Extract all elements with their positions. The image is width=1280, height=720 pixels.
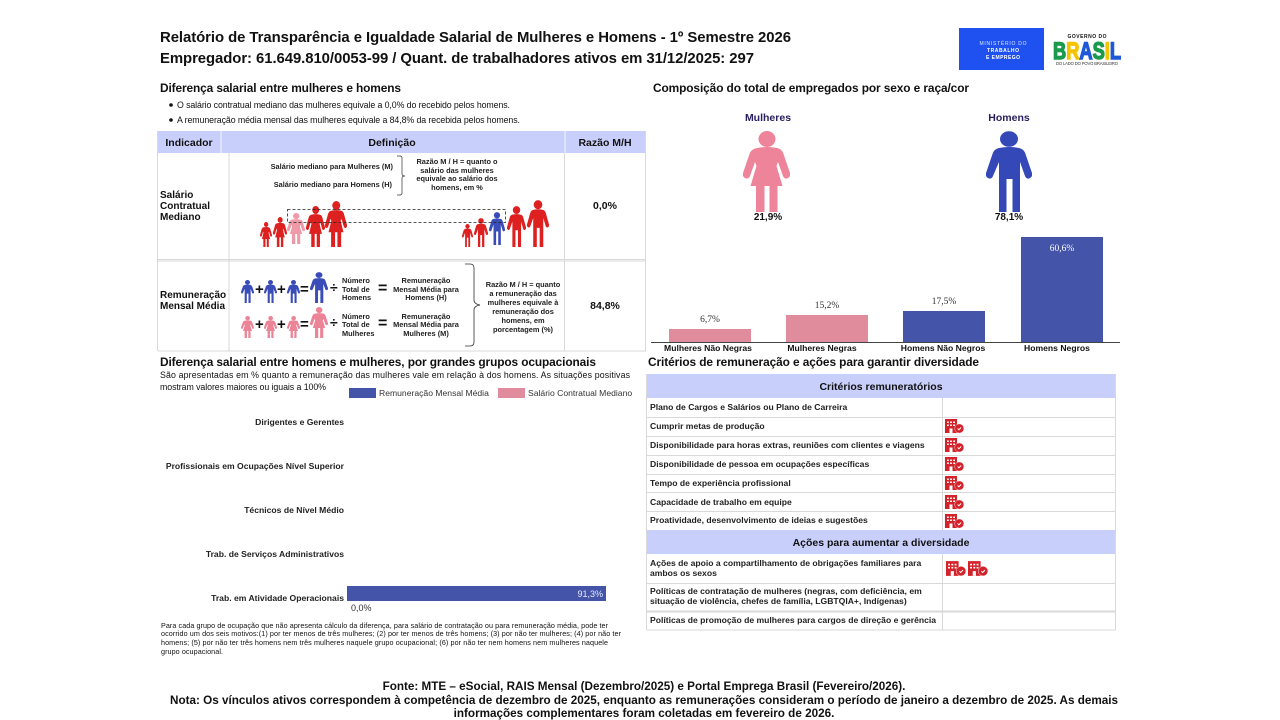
median highlight box <box>288 210 506 222</box>
bar chart: sexo e raça/cor: Homens Não Negros <box>901 343 985 353</box>
formula: men: Número <box>342 276 370 285</box>
summary bullets: O salário contratual mediano das mulheres equivale a 0,0% do recebido pelos homens. <box>177 100 510 110</box>
footnote: motivos: grupo ocupacional. <box>161 647 223 656</box>
action rows <box>650 558 936 625</box>
formula: women: Total de <box>342 320 370 329</box>
chart legend: Salário Contratual Mediano <box>528 388 632 398</box>
summary bullets <box>169 100 520 125</box>
panel: criteria table <box>646 374 1116 630</box>
logo: Governo do Brasil: BRASIL <box>1053 38 1121 65</box>
chart legend: Remuneração Mensal Média <box>379 388 489 398</box>
brace and ratio definition: remuneração dos <box>492 307 554 316</box>
formula: men: + <box>255 281 264 298</box>
row label: remuneração mensal média <box>160 290 226 312</box>
brace and ratio definition: porcentagem (%) <box>493 325 554 334</box>
table header: Indicador <box>165 137 213 149</box>
pictogram: homens: 78,1% <box>995 212 1023 223</box>
formula: women: Número <box>342 312 370 321</box>
bar chart: sexo e raça/cor <box>651 237 1120 353</box>
logo: Ministério do Trabalho e Emprego: TRABALHO <box>987 48 1019 54</box>
report title <box>160 30 791 67</box>
brace and ratio definition: mulheres equivale à <box>488 298 559 307</box>
chart description: mostram valores maiores ou iguais a 100% <box>160 382 326 392</box>
brace and ratio definition <box>465 264 561 346</box>
formula: men: = <box>378 280 387 297</box>
formula: men: Homens <box>342 293 371 302</box>
bar chart: grupos ocupacionais: Dirigentes e Gerentes <box>255 417 344 427</box>
icon group: women ranked by salary <box>260 201 347 247</box>
pictogram: homens <box>986 112 1032 223</box>
icon group: men ranked by salary <box>462 200 549 247</box>
bar chart: grupos ocupacionais: 91,3% <box>577 589 603 599</box>
bar chart: grupos ocupacionais: Técnicos de Nível Médio <box>244 505 344 515</box>
source and note: Nota: Os vínculos ativos correspondem à competência de dezembro de 2025, enquanto as remunerações consideram o período de janeiro a dezembro de 2025. As demais <box>170 694 1118 707</box>
value: razão remuneração: 84,8% <box>590 300 621 312</box>
row label: salário contratual mediano: Contratual <box>160 201 210 212</box>
heading: grupos ocupacionais: Diferença salarial entre homens e mulheres, por grandes grupos ocupacionais <box>160 355 596 369</box>
heading: composição: Composição do total de empregados por sexo e raça/cor <box>653 81 969 95</box>
logo: Ministério do Trabalho e Emprego: E EMPREGO <box>986 55 1020 61</box>
action rows: Ações de apoio a compartilhamento de obrigações familiares para <box>650 558 921 568</box>
chart description: São apresentadas em % quanto a remuneração das mulheres vale em relação à dos homens. As situações positivas <box>160 370 631 380</box>
formula: women: ÷ <box>330 314 338 330</box>
chart description <box>160 370 631 392</box>
definition text: salário mediano: equivale ao salário dos <box>416 174 498 183</box>
bar chart: sexo e raça/cor: Mulheres Não Negras <box>664 343 752 353</box>
criteria rows: Disponibilidade de pessoa em ocupações específicas <box>650 459 869 469</box>
definition text: salário mediano <box>271 156 498 195</box>
formula: men <box>241 272 460 303</box>
panel: salary indicator table <box>158 131 646 351</box>
source and note <box>170 680 1118 720</box>
heading: diferença salarial: Diferença salarial entre mulheres e homens <box>160 81 401 95</box>
chart legend <box>349 388 632 398</box>
formula: men: Remuneração <box>402 276 451 285</box>
bar chart: sexo e raça/cor: 17,5% <box>932 297 956 307</box>
header: ações para diversidade <box>647 530 1115 554</box>
criteria rows: Proatividade, desenvolvimento de ideias e sugestões <box>650 515 868 525</box>
logo: Ministério do Trabalho e Emprego: MINISTÉRIO DO <box>980 40 1027 47</box>
criteria rows: Plano de Cargos e Salários ou Plano de Carreira <box>650 402 847 412</box>
pictogram: mulheres: Mulheres <box>745 112 791 124</box>
row label: remuneração mensal média: Mensal Média <box>160 301 225 312</box>
row label: salário contratual mediano: Mediano <box>160 212 201 223</box>
action rows: ambos os sexos <box>650 568 717 578</box>
definition text: salário mediano: Salário mediano para Homens (H) <box>274 180 393 189</box>
definition text: salário mediano: Razão M / H = quanto o <box>416 157 498 166</box>
bar chart: grupos ocupacionais: Trab. de Serviços Administrativos <box>206 549 344 559</box>
header: ações para diversidade: Ações para aumentar a diversidade <box>793 537 970 549</box>
bar chart: grupos ocupacionais: 0,0% <box>351 603 372 613</box>
pictogram: mulheres <box>743 112 791 223</box>
formula: women: Mensal Média para <box>393 320 460 329</box>
bar chart: grupos ocupacionais <box>166 417 606 613</box>
company icons: criteria <box>945 419 964 528</box>
formula: men: + <box>277 281 286 298</box>
logo: Governo do Brasil: GOVERNO DO <box>1068 34 1107 40</box>
formula: women: + <box>277 316 286 333</box>
brace and ratio definition: homens, em <box>501 316 545 325</box>
source and note: Fonte: MTE – eSocial, RAIS Mensal (Dezembro/2025) e Portal Emprega Brasil (Fevereiro/2026). <box>383 680 905 693</box>
footnote: motivos: Para cada grupo de ocupação que não apresenta cálculo da diferença, para salário de contratação ou para remuneração média, pode ter <box>161 621 609 630</box>
footnote: motivos: homens; (5) por não ter três homens nem três mulheres naquele grupo ocupacional; (6) por não ter nem homens nem mulheres naquele <box>161 638 608 647</box>
formula: men: Mensal Média para <box>393 285 460 294</box>
pictogram: mulheres: 21,9% <box>754 212 782 223</box>
formula: women: Mulheres <box>342 329 374 338</box>
table header: Razão M/H <box>578 137 632 149</box>
report title: Relatório de Transparência e Igualdade Salarial de Mulheres e Homens - 1º Semestre 2026 <box>160 30 791 46</box>
header: critérios remuneratórios <box>647 374 1115 398</box>
header: critérios remuneratórios: Critérios remuneratórios <box>819 381 943 393</box>
row label: salário contratual mediano <box>160 190 210 223</box>
heading: critérios: Critérios de remuneração e ações para garantir diversidade <box>648 355 979 369</box>
formula: women: Mulheres (M) <box>403 329 449 338</box>
footnote: motivos <box>161 621 622 656</box>
formula: women: = <box>378 315 387 332</box>
bar chart: sexo e raça/cor: Mulheres Negras <box>787 343 857 353</box>
criteria rows: Cumprir metas de produção <box>650 421 765 431</box>
company icons: actions <box>946 561 988 576</box>
definition text: salário mediano: homens, em % <box>431 183 483 192</box>
pictogram: homens: Homens <box>988 112 1030 124</box>
definition text: salário mediano: Salário mediano para Mulheres (M) <box>271 162 394 171</box>
criteria rows: Capacidade de trabalho em equipe <box>650 497 792 507</box>
report title: Empregador: 61.649.810/0053-99 / Quant. de trabalhadores ativos em 31/12/2025: 297 <box>160 51 754 67</box>
formula: women: Remuneração <box>402 312 451 321</box>
logo: Ministério do Trabalho e Emprego <box>959 28 1044 70</box>
brace and ratio definition: Razão M / H = quanto <box>486 280 561 289</box>
bar chart: grupos ocupacionais: Profissionais em Ocupações Nível Superior <box>166 461 345 471</box>
criteria rows <box>650 402 925 525</box>
definition text: salário mediano: salário das mulheres <box>420 166 494 175</box>
value: razão salário: 0,0% <box>593 200 618 212</box>
bar chart: sexo e raça/cor: 15,2% <box>815 301 839 311</box>
formula: men: = <box>300 281 309 298</box>
bar chart: sexo e raça/cor: Homens Negros <box>1024 343 1090 353</box>
formula: men: ÷ <box>330 279 338 295</box>
brace and ratio definition: a remuneração das <box>489 289 557 298</box>
bar chart: grupos ocupacionais: Trab. em Atividade Operacionais <box>211 593 344 603</box>
table header <box>158 131 646 153</box>
bar chart: sexo e raça/cor: 6,7% <box>700 315 720 325</box>
row label: salário contratual mediano: Salário <box>160 190 193 201</box>
summary bullets: A remuneração média mensal das mulheres equivale a 84,8% da recebida pelos homens. <box>177 115 520 125</box>
criteria rows: Disponibilidade para horas extras, reuniões com clientes e viagens <box>650 440 925 450</box>
criteria rows: Tempo de experiência profissional <box>650 478 791 488</box>
formula: men: Homens (H) <box>405 293 447 302</box>
action rows: Políticas de contratação de mulheres (negras, com deficiência, em <box>650 586 922 596</box>
row label: remuneração mensal média: Remuneração <box>160 290 226 301</box>
bar chart: sexo e raça/cor: 60,6% <box>1050 244 1074 254</box>
formula: men: Total de <box>342 285 370 294</box>
action rows: situação de violência, chefes de família, LGBTQIA+, Indígenas) <box>650 596 907 606</box>
logo: Governo do Brasil: DO LADO DO POVO BRASILEIRO <box>1056 61 1119 66</box>
footnote: motivos: ocorrido um dos seis motivos:(1) por ter menos de três mulheres; (2) por ter menos de três homens; (3) por não ter mulheres; (4) por não ter <box>161 629 622 638</box>
source and note: informações complementares foram coletadas em fevereiro de 2026. <box>454 707 834 720</box>
formula: women <box>241 307 460 338</box>
table header: Definição <box>368 137 416 149</box>
formula: women: + <box>255 316 264 333</box>
formula: women: = <box>300 316 309 333</box>
action rows: Políticas de promoção de mulheres para cargos de direção e gerência <box>650 615 936 625</box>
